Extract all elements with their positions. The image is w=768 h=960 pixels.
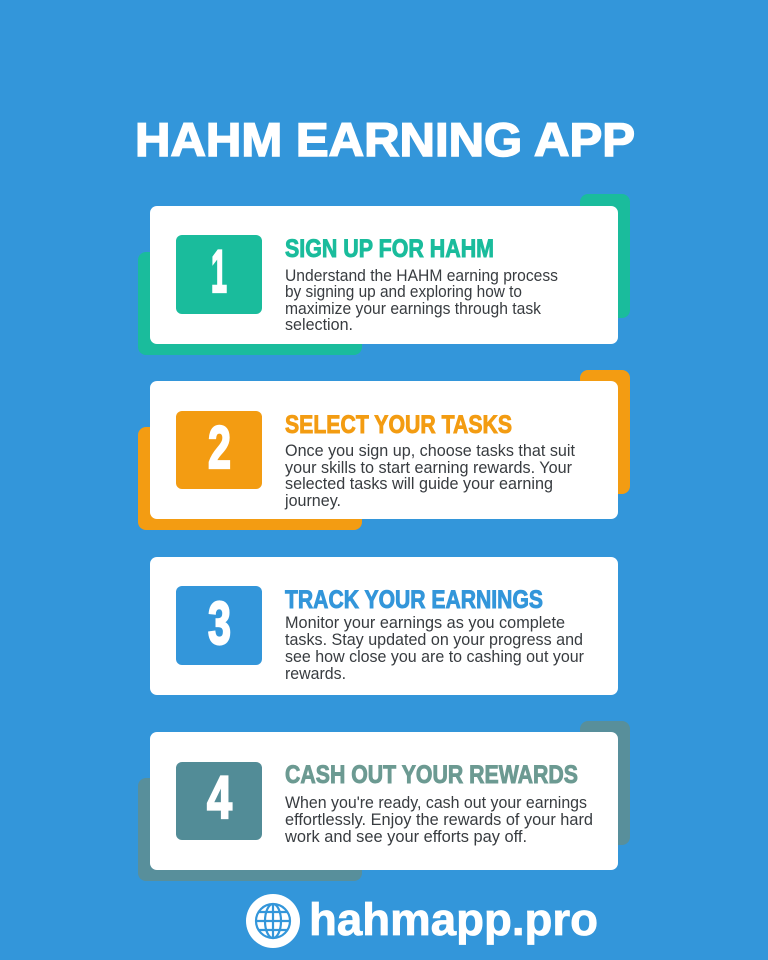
- heading: cash out your rewards: CASH OUT YOUR REWARDS: [285, 761, 578, 789]
- text block: step 3 description: see how close you are to cashing out your: [285, 647, 584, 666]
- text block: step 4 description: effortlessly. Enjoy the rewards of your hard: [285, 810, 593, 829]
- footer: website: [246, 894, 598, 948]
- panel: step 4 cash out: [138, 721, 630, 881]
- icon: number 3: [176, 586, 262, 665]
- website address: hahmapp.pro: [309, 894, 598, 945]
- text block: step 2 description: journey.: [284, 491, 341, 510]
- panel: step 2 select tasks: [138, 370, 630, 530]
- icon: number 1: 1: [211, 238, 227, 305]
- panel: step 3 track earnings: [150, 557, 618, 695]
- text block: step 3 description: Monitor your earnings as you complete: [285, 613, 565, 632]
- text block: step 2 description: [284, 441, 575, 510]
- text block: step 4 description: work and see your efforts pay off.: [284, 827, 527, 846]
- text block: step 2 description: your skills to start earning rewards. Your: [285, 458, 572, 477]
- text block: step 3 description: tasks. Stay updated on your progress and: [285, 630, 583, 649]
- icon: globe: [246, 894, 300, 948]
- icon: number 3: 3: [208, 590, 231, 657]
- text block: step 4 description: When you're ready, cash out your earnings: [285, 793, 587, 812]
- text block: step 1 description: Understand the HAHM earning process: [285, 266, 558, 285]
- icon: number 4: [176, 762, 262, 840]
- text block: step 1 description: [285, 266, 558, 334]
- icon: number 2: [176, 411, 262, 489]
- text block: step 3 description: rewards.: [285, 664, 346, 683]
- icon: number 2: 2: [208, 414, 231, 481]
- heading: select your tasks: SELECT YOUR TASKS: [285, 411, 512, 439]
- text block: step 4 description: [284, 793, 593, 846]
- icon: number 4: 4: [207, 764, 232, 831]
- text block: step 1 description: selection.: [285, 315, 353, 334]
- panel: step 1 sign up: [138, 194, 630, 355]
- heading: sign up for hahm: SIGN UP FOR HAHM: [285, 235, 494, 263]
- text block: step 2 description: selected tasks will guide your earning: [285, 474, 553, 493]
- icon: number 1: [176, 235, 262, 314]
- title: HAHM EARNING APP: [135, 113, 635, 166]
- text block: step 1 description: by signing up and exploring how to: [285, 282, 522, 301]
- heading: track your earnings: TRACK YOUR EARNINGS: [285, 586, 543, 614]
- text block: step 2 description: Once you sign up, choose tasks that suit: [285, 441, 575, 460]
- text block: step 3 description: [285, 613, 584, 683]
- text block: step 1 description: maximize your earnings through task: [285, 299, 541, 318]
